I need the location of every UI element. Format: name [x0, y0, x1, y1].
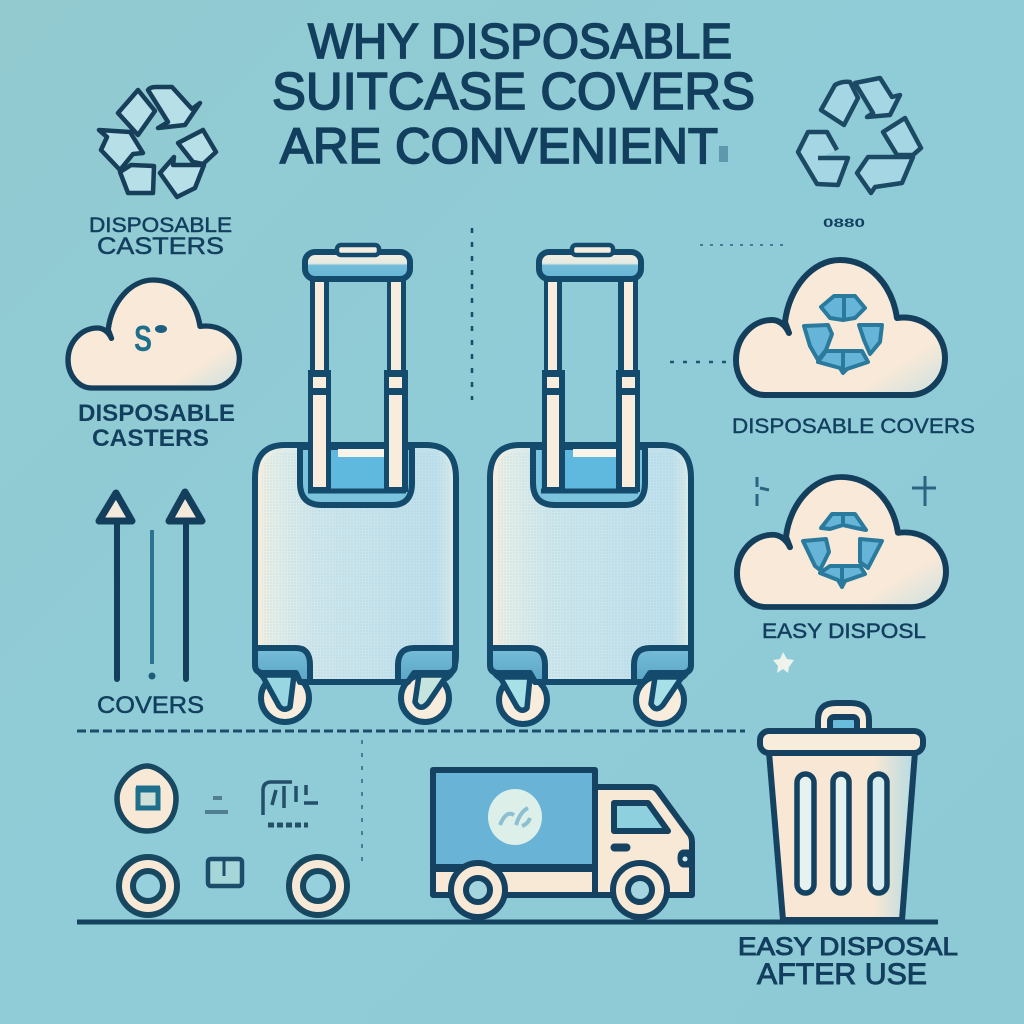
label: easy disposal after use: AFTER USE [757, 958, 927, 991]
grip top [572, 245, 613, 255]
recycle glyph [804, 296, 882, 373]
icon: recycling symbol right [798, 78, 921, 193]
title: ARE CONVENIENT [280, 118, 718, 174]
badge [488, 789, 542, 845]
right rail [384, 280, 408, 492]
label: easy disposal after use [738, 933, 958, 991]
handle bar [539, 252, 641, 279]
title [272, 15, 755, 174]
wheels [451, 863, 505, 917]
vertical dashed divider lower [361, 740, 363, 862]
grip top [337, 245, 379, 255]
label: disposable casters left [78, 400, 235, 452]
title: SUITCASE COVERS [272, 63, 755, 121]
label: disposable casters top: DISPOSABLE [89, 214, 232, 237]
window [614, 803, 668, 831]
label: easy disposal: EASY DISPOSL [762, 620, 926, 643]
label: disposable casters top: CASTERS [97, 233, 224, 260]
label: covers: COVERS [97, 692, 204, 719]
label: disposable casters left: DISPOSABLE [78, 400, 235, 427]
sparkle marks [757, 476, 936, 506]
suitcase left [255, 245, 456, 722]
body [769, 752, 915, 920]
small box [208, 859, 242, 886]
arrows up [99, 492, 202, 680]
vertical dotted divider [471, 228, 473, 400]
wheel right [289, 857, 347, 915]
lid [760, 731, 923, 753]
blurred label [263, 782, 318, 825]
icon: cloud right lower [737, 477, 946, 607]
right rail [616, 280, 640, 492]
handle bar [305, 252, 410, 279]
wheels [261, 674, 309, 722]
small label right: 0880 [823, 216, 866, 230]
icon: cloud right upper [736, 260, 945, 395]
lower cargo [433, 869, 595, 895]
icon: cloud left [68, 280, 239, 388]
left rail [308, 280, 331, 492]
delivery truck [433, 770, 692, 917]
corner guards [490, 648, 545, 682]
corner guards [255, 648, 310, 682]
wheel left [119, 857, 177, 915]
recycle glyph [803, 514, 882, 587]
dashed ground divider [77, 730, 745, 732]
suitcase body [255, 445, 456, 682]
icon: recycling symbol left [99, 87, 216, 197]
dotted connector top right [700, 244, 790, 246]
badge glyph [136, 788, 160, 808]
handle well [533, 447, 645, 505]
dotted connector middle right [670, 361, 728, 363]
label: disposable casters left: CASTERS [92, 425, 209, 452]
headlight [678, 850, 689, 867]
left rail [542, 280, 565, 492]
wheels [499, 676, 547, 724]
label: disposable covers: DISPOSABLE COVERS [732, 415, 975, 438]
badge [117, 766, 176, 831]
slots [797, 774, 814, 893]
cargo box [433, 770, 595, 867]
icon: small star [773, 652, 794, 673]
cab [595, 787, 692, 895]
label: easy disposal after use: EASY DISPOSAL [738, 933, 958, 961]
door handle [611, 844, 630, 851]
handle well [300, 447, 412, 505]
vehicle outline left [117, 766, 347, 915]
ground line [77, 920, 938, 924]
title: WHY DISPOSABLE [308, 15, 732, 69]
handle [818, 703, 869, 732]
glyph in left cloud: S [134, 318, 152, 359]
icon: trash can [760, 703, 923, 920]
suitcase body [490, 445, 691, 682]
blurred marks [205, 798, 228, 812]
suitcase right [490, 245, 691, 724]
label: disposable casters top [89, 214, 232, 260]
